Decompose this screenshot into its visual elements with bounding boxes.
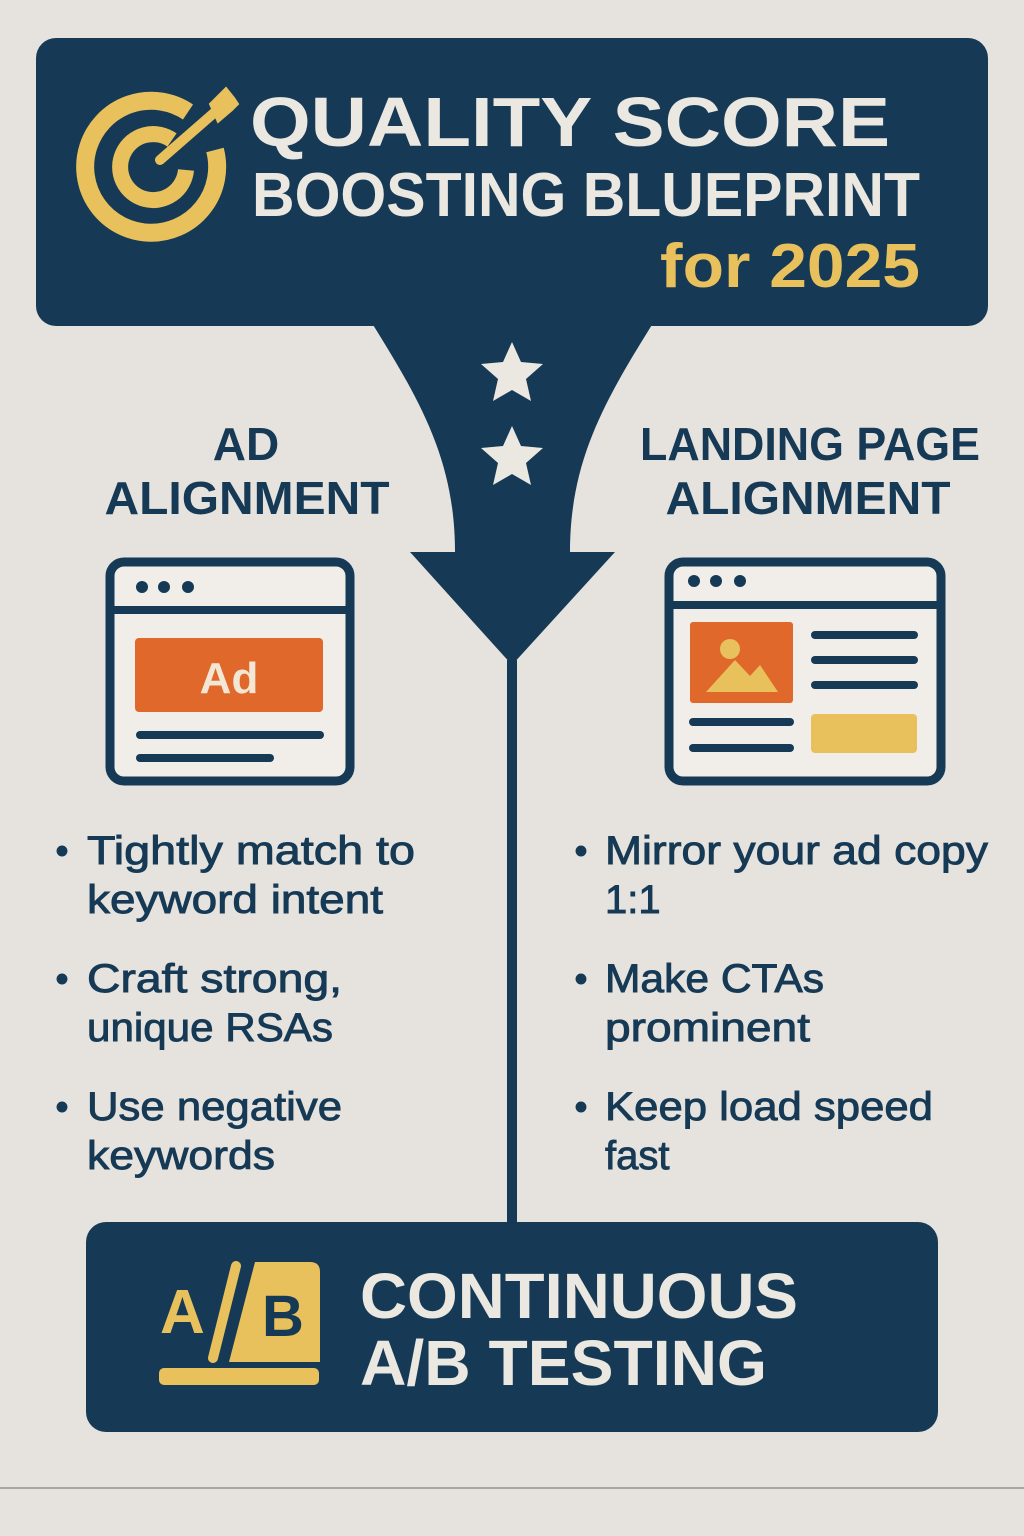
bullet list: landing page alignment: [576, 829, 988, 1178]
icon: A/B: B: [262, 1284, 304, 1349]
panel: continuous A/B testing: [86, 1222, 938, 1432]
icon: target with arrow: [85, 88, 238, 233]
icon: A/B: A: [160, 1278, 205, 1347]
icon: ad browser: Ad: [200, 654, 258, 703]
panel: continuous A/B testing: A/B TESTING: [360, 1327, 767, 1399]
heading: landing page alignment: LANDING PAGE: [640, 418, 980, 470]
title: BOOSTING BLUEPRINT: [252, 161, 920, 230]
heading: ad alignment: [104, 418, 390, 524]
bullet list: ad alignment: keyword intent: [87, 878, 383, 922]
bullet list: ad alignment: keywords: [87, 1134, 275, 1178]
bullet list: ad alignment: Tightly match to: [87, 829, 415, 873]
header panel: [36, 38, 988, 326]
icon: stars: [481, 342, 543, 485]
bullet list: ad alignment: Use negative: [87, 1085, 342, 1129]
bullet list: ad alignment: unique RSAs: [87, 1006, 333, 1050]
heading: ad alignment: ALIGNMENT: [104, 472, 390, 524]
funnel arrow: [370, 320, 655, 1226]
panel: continuous A/B testing: CONTINUOUS: [360, 1260, 798, 1332]
title: [250, 83, 920, 301]
bullet list: ad alignment: Craft strong,: [87, 957, 342, 1001]
heading: landing page alignment: [640, 418, 980, 524]
heading: ad alignment: AD: [213, 418, 279, 470]
bullet list: landing page alignment: prominent: [605, 1006, 810, 1050]
bullet list: landing page alignment: 1:1: [605, 878, 661, 922]
bullet list: landing page alignment: Make CTAs: [605, 957, 824, 1001]
title: for 2025: [660, 232, 920, 301]
bullet list: landing page alignment: Mirror your ad copy: [605, 829, 988, 873]
icon: ad browser: [110, 562, 350, 781]
heading: landing page alignment: ALIGNMENT: [666, 472, 950, 524]
icon: landing page browser: [669, 562, 941, 781]
bullet list: landing page alignment: Keep load speed: [605, 1085, 933, 1129]
bullet list: ad alignment: [57, 829, 415, 1178]
bullet list: landing page alignment: fast: [605, 1134, 669, 1178]
icon: A/B: [159, 1262, 320, 1385]
title: QUALITY SCORE: [250, 83, 890, 161]
